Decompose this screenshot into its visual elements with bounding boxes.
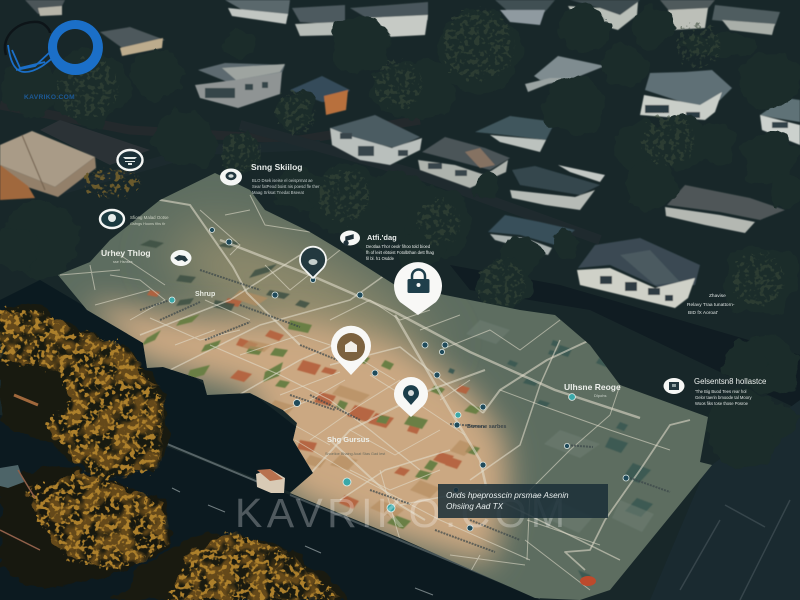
label: Uihsne Reoge: Dlpohs bbox=[594, 393, 606, 398]
house: dark roof with terrace bbox=[510, 165, 605, 210]
label: Snog Shilog: Sear fatPeod boist nis poesd fle ther bbox=[252, 184, 320, 189]
icon: house pin bbox=[331, 326, 371, 375]
house: top left row bbox=[25, 0, 428, 56]
icon: big lock pin bbox=[394, 262, 442, 315]
street detail lower left bbox=[0, 395, 40, 550]
label: Snog Shilog: Maag Srksat Tnedat Bseeat bbox=[252, 190, 305, 195]
map warm tan zone bbox=[85, 300, 510, 565]
icon: square badge bbox=[664, 378, 684, 394]
label: Zhavise: BID fX Aoroat' bbox=[688, 310, 718, 316]
label: Zhavise: Relavy Traa tunattorn- bbox=[687, 302, 735, 308]
house: far right bbox=[760, 98, 800, 145]
truck bbox=[256, 469, 285, 493]
label: Alt dag bbox=[366, 233, 435, 261]
dark grass bank bbox=[0, 280, 318, 492]
house: blue roof orange wall bbox=[290, 76, 350, 115]
icon: service ring top left bbox=[118, 150, 142, 170]
label: map note bbox=[130, 215, 169, 226]
label: Urhey Thlog: Urhey Thlog bbox=[101, 248, 151, 258]
road dashes and kerb bbox=[160, 441, 790, 600]
label: Gelsentsn holiastce: 'The Big Buod Tees rear hol bbox=[695, 389, 747, 394]
houses bbox=[0, 0, 800, 308]
label: Snog Shilog: Snng Skiilog bbox=[251, 162, 302, 172]
house: pale roof upper bbox=[525, 56, 605, 92]
house: large upper right bbox=[640, 70, 732, 120]
label: Alt dag: Deotlaa Thor oeolr fihoo told bioed bbox=[366, 244, 431, 249]
watermark: KAVRIKO.COM bbox=[235, 490, 565, 536]
label: Shrup: Shrup bbox=[195, 291, 215, 298]
label: Shg Gersus: Shg Gursus bbox=[327, 435, 370, 444]
label: Gelsentsn holiastce bbox=[694, 377, 766, 406]
parcels bbox=[140, 240, 654, 583]
house: large white front bbox=[577, 238, 700, 308]
amber trees: bottom centre cluster bbox=[110, 530, 350, 600]
icon: chat bubble bbox=[220, 168, 242, 186]
tree highlights bbox=[60, 9, 786, 309]
house: top centre row bbox=[495, 0, 780, 35]
icon: music badge bbox=[340, 230, 360, 246]
label: Snog Shilog bbox=[251, 162, 320, 195]
logo wordmark: KAVRIKO.COM bbox=[24, 94, 75, 101]
pavement: bottom right bbox=[650, 400, 800, 600]
house: right centre bbox=[665, 185, 785, 233]
label: Snog Shilog: BLO Dsek iseise el oeisprmat ae bbox=[252, 178, 313, 183]
label: Urhey Thlog bbox=[101, 248, 151, 264]
label: map note: Gsfngs Hoons fihs tlr bbox=[130, 222, 166, 226]
house: brown roof bbox=[418, 137, 510, 188]
callout box bbox=[438, 484, 608, 518]
label: Zhavise bbox=[687, 293, 735, 316]
label: Gelsentsn holiastce: Woos fiks tose those Posroe bbox=[695, 401, 749, 406]
road: upper street network bbox=[0, 105, 600, 240]
amber trees: lower left cluster bbox=[0, 465, 170, 590]
dark tree canopy bbox=[0, 6, 800, 468]
house: teal roof bbox=[475, 116, 555, 152]
amber tree beside warehouse bbox=[82, 168, 142, 196]
logo bbox=[5, 20, 103, 101]
callout text: Onds hpeprosscin prsmae Asenin bbox=[446, 491, 569, 500]
callout bbox=[438, 484, 608, 518]
callout text: Ohsiing Aad TX bbox=[446, 502, 504, 511]
map base bbox=[40, 160, 730, 600]
house: white two storey bbox=[330, 115, 422, 165]
map mid tone bbox=[158, 206, 442, 360]
road: right street bbox=[450, 265, 800, 410]
label: Uihsne Reoge: Ulhsne Reoge bbox=[564, 382, 621, 392]
label: Urhey Thlog: sse Hsnses bbox=[113, 260, 133, 264]
label: Alt dag: Atfi.'dag bbox=[367, 233, 397, 242]
map labels and markers bbox=[140, 228, 670, 552]
label: map note: Sfiong Malad Ootse bbox=[130, 215, 169, 220]
map overlay bbox=[40, 160, 730, 600]
amber trees: upper left cluster bbox=[0, 306, 168, 480]
icon: ring location bbox=[100, 210, 124, 228]
house: lower teal bbox=[488, 215, 575, 255]
logo ring bbox=[48, 20, 103, 75]
label: Gelsentsn holiastce: Gelsentsn8 hollastce bbox=[694, 377, 766, 386]
road: bottom avenue bbox=[0, 415, 540, 600]
label: Alt dag: fil bl. h1 Osdde bbox=[366, 256, 395, 261]
warehouse bbox=[0, 131, 96, 200]
label: map street note: Snoelioe Bhaing Aoat Stas Gad lest bbox=[325, 452, 386, 456]
map streets bbox=[60, 195, 690, 590]
icon: outline pin bbox=[300, 247, 326, 278]
label: Zhavise: Zhavise bbox=[709, 293, 726, 299]
icon: teal drop pin bbox=[394, 377, 428, 417]
label: Alt dag: fh of leirt ebtoist Fotolbthan dett fhag bbox=[366, 250, 435, 255]
logo blue strands bbox=[8, 45, 57, 72]
logo dark arc bbox=[5, 22, 50, 55]
label: Bunsne sarbes: Bunsne sarbes bbox=[467, 424, 506, 430]
parking lot bbox=[40, 120, 150, 165]
house: grey gabled bbox=[195, 63, 285, 108]
icon: red pin bbox=[580, 576, 596, 586]
icon: car badge bbox=[170, 250, 192, 266]
label: Uihsne Reoge bbox=[564, 382, 621, 398]
label: Gelsentsn holiastce: Gelor taerin bmoode tal Moory bbox=[695, 395, 752, 400]
